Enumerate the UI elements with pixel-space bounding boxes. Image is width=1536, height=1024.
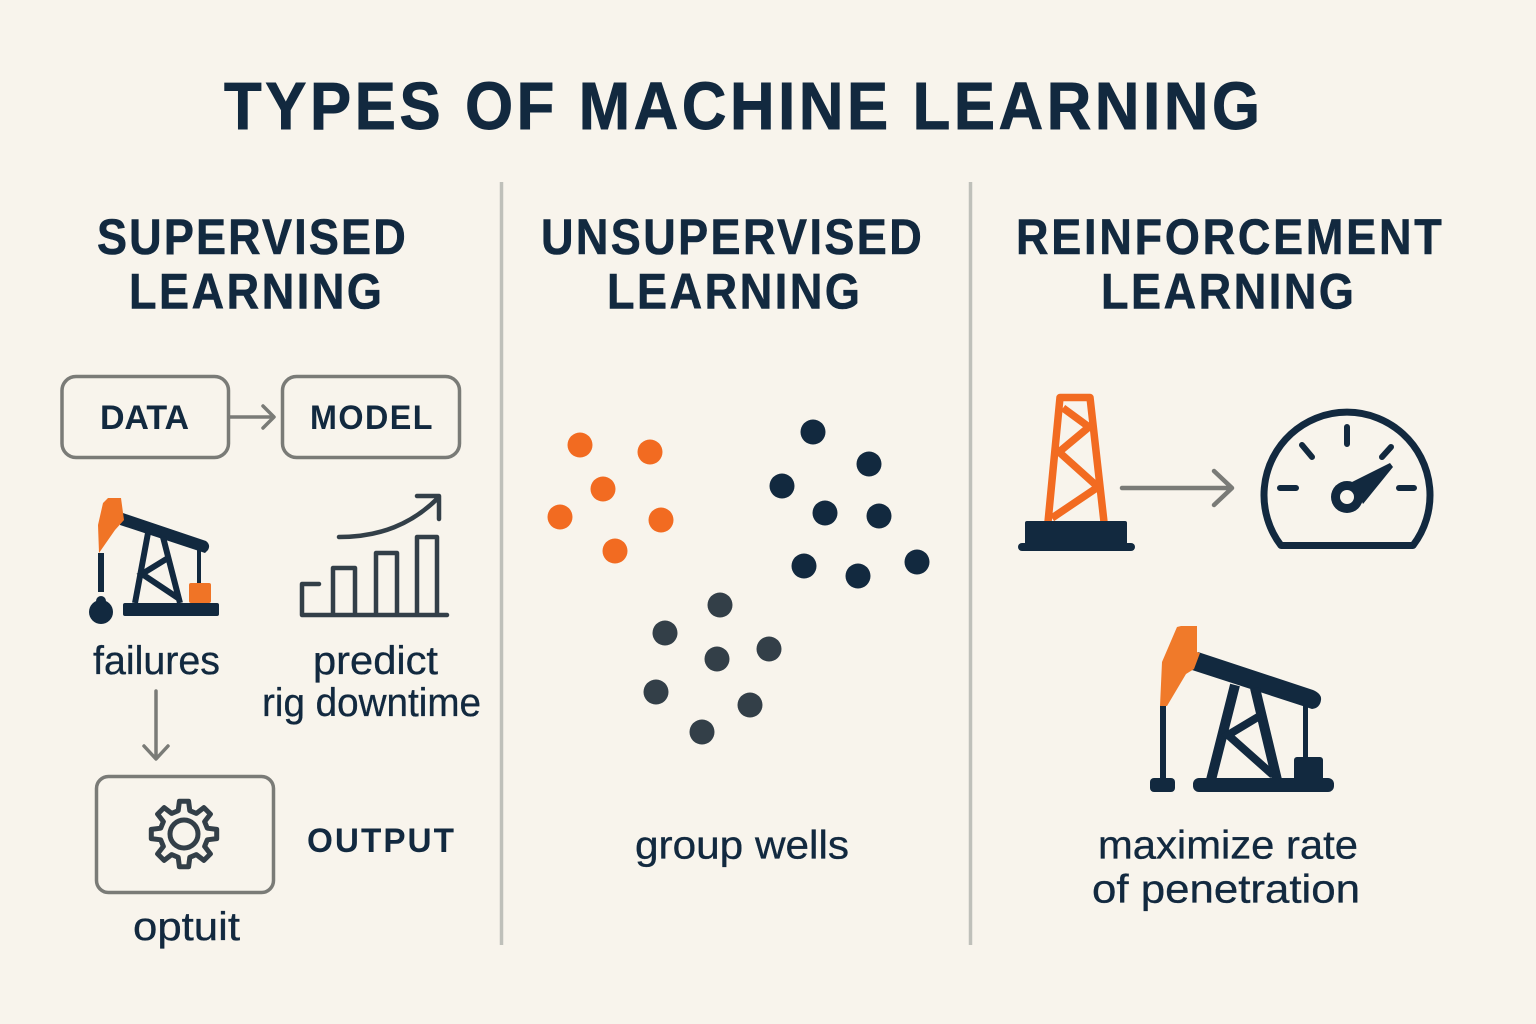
- arrow: failures to output: [144, 691, 168, 759]
- label: maximize rate of penetration: of penetration: [1092, 868, 1360, 912]
- label: predict rig downtime: [262, 639, 481, 725]
- cluster: grey points: [644, 592, 782, 744]
- icon: drilling derrick: [1018, 398, 1135, 551]
- heading: supervised learning: [97, 210, 406, 320]
- heading: reinforcement learning: [1016, 210, 1442, 320]
- cluster: navy points: [770, 420, 930, 588]
- model box: [282, 376, 460, 458]
- heading: unsupervised learning: LEARNING: [607, 264, 860, 320]
- label: maximize rate of penetration: maximize rate: [1098, 824, 1358, 868]
- label: predict rig downtime: rig downtime: [262, 681, 481, 725]
- heading: supervised learning: LEARNING: [129, 264, 382, 320]
- icon: rising bar chart: [302, 496, 447, 615]
- data box: [62, 376, 228, 458]
- heading: supervised learning: SUPERVISED: [97, 210, 406, 266]
- icon: small pumpjack: [89, 498, 219, 624]
- panel: unsupervised learning: [541, 210, 930, 868]
- heading: reinforcement learning: REINFORCEMENT: [1016, 210, 1442, 266]
- heading: unsupervised learning: [541, 210, 922, 320]
- panel: reinforcement learning: [1016, 210, 1442, 912]
- title: TYPES OF MACHINE LEARNING: [224, 69, 1260, 144]
- cluster: orange points: [548, 432, 674, 564]
- arrow: derrick to gauge: [1122, 471, 1232, 505]
- label: OUTPUT: OUTPUT: [307, 823, 454, 860]
- arrow: data to model: [229, 406, 274, 428]
- data box: DATA: [100, 399, 189, 437]
- label: group wells: group wells: [635, 824, 849, 868]
- icon: gear: [151, 801, 217, 867]
- label: maximize rate of penetration: [1092, 824, 1360, 912]
- model box: MODEL: [310, 399, 433, 437]
- label: optuit: optuit: [133, 905, 240, 949]
- label: predict rig downtime: predict: [313, 639, 438, 683]
- panel: supervised learning: [62, 210, 481, 949]
- icon: large pumpjack: [1150, 626, 1334, 792]
- icon: speed gauge: [1264, 412, 1430, 546]
- heading: reinforcement learning: LEARNING: [1101, 264, 1354, 320]
- heading: unsupervised learning: UNSUPERVISED: [541, 210, 922, 266]
- label: failures: failures: [93, 639, 220, 683]
- output box with gear: [96, 776, 274, 892]
